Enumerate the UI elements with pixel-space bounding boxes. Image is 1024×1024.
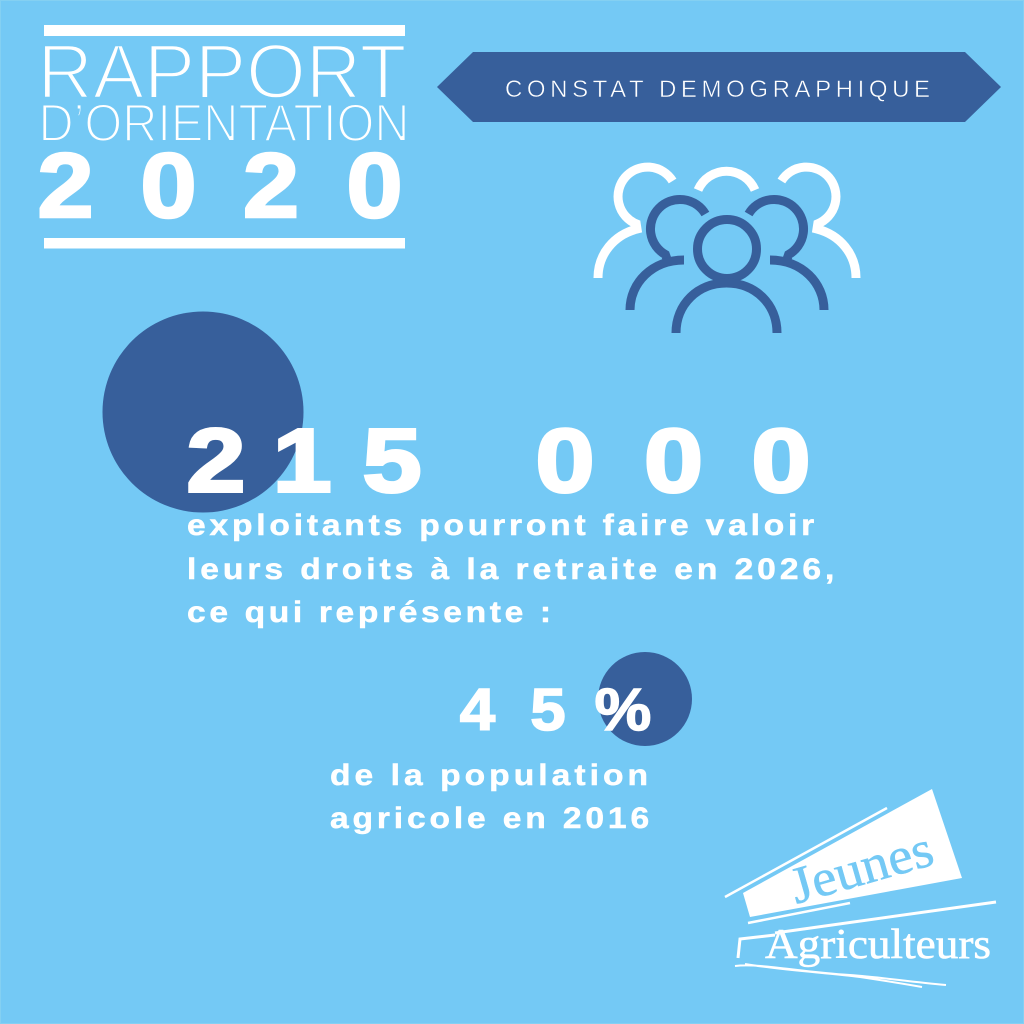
icon: back row: [598, 167, 856, 278]
logo word: Agriculteurs: Agriculteurs: [765, 922, 991, 968]
title block: [37, 25, 410, 248]
logo word: Jeunes: Jeunes: [784, 821, 940, 916]
title: d'orientation: D’ORIENTATION: [38, 94, 410, 153]
banner: CONSTAT DEMOGRAPHIQUE: [505, 76, 930, 103]
logo: Jeunes Agriculteurs: [725, 789, 996, 987]
title: year: 2020: [37, 134, 403, 237]
description paragraph: [187, 508, 834, 629]
description paragraph: exploitants pourront faire valoir: [187, 508, 814, 542]
description paragraph: leurs droits à la retraite en 2026,: [187, 552, 834, 586]
icon: front row: [630, 199, 824, 333]
percentage description: agricole en 2016: [330, 801, 649, 835]
icon: group of people: [598, 167, 856, 333]
main figure: 215 000: [186, 410, 811, 511]
decorative circle small: [598, 652, 692, 746]
title: rapport: RAPPORT: [38, 29, 406, 115]
banner: [437, 52, 1001, 122]
percentage figure: 45%: [460, 677, 651, 743]
percentage description: [330, 758, 649, 835]
percentage description: de la population: [330, 758, 648, 792]
description paragraph: ce qui représente :: [187, 595, 551, 629]
decorative circle large: [102, 312, 304, 512]
